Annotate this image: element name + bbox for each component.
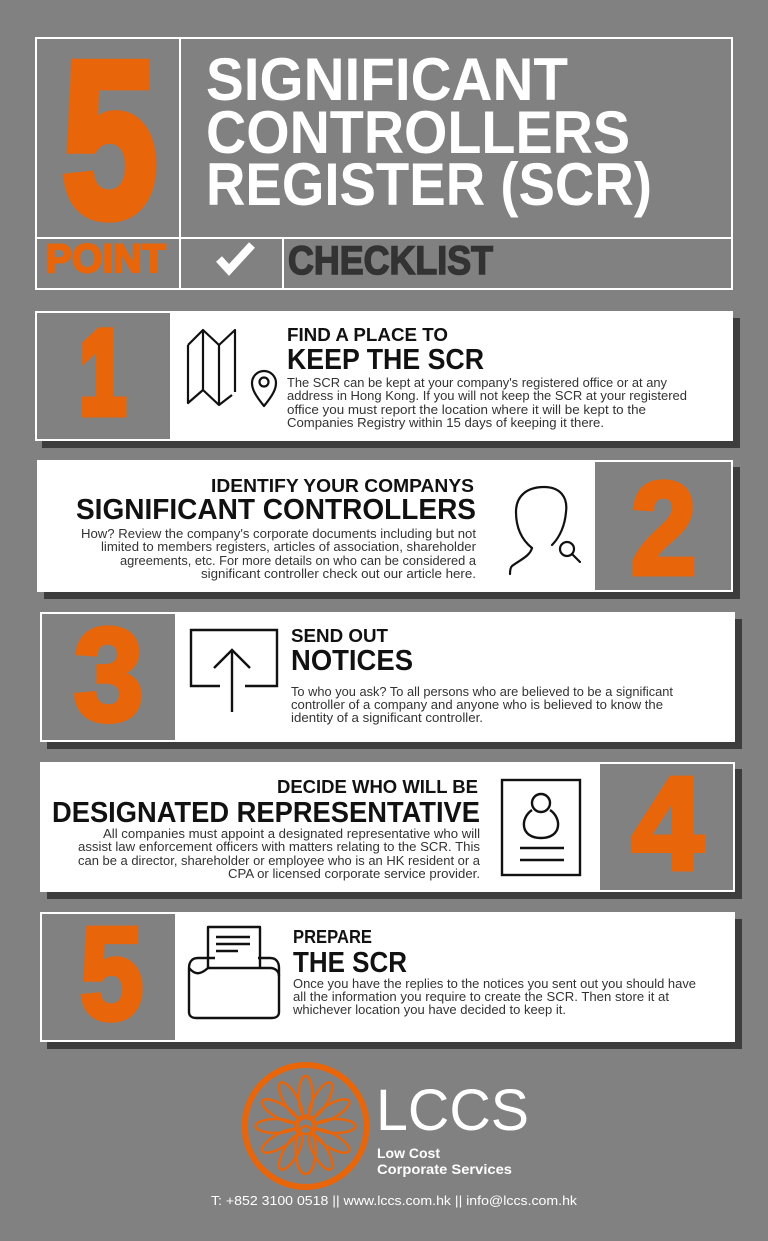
card 1: keep the SCR: The SCR can be kept at your company's registered office or at any xyxy=(287,376,668,390)
card 3: send out notices: identity of a significant controller. xyxy=(291,711,483,725)
footer contact line: T: +852 3100 0518 || www.lccs.com.hk || info@lccs.com.hk xyxy=(211,1193,578,1208)
icon: checkmark xyxy=(219,245,252,270)
big number 5: 5 xyxy=(62,16,158,264)
card 1: keep the SCR: address in Hong Kong. If you will not keep the SCR at your registered xyxy=(287,389,687,403)
card 3: send out notices xyxy=(40,601,742,749)
card 1: keep the SCR: office you must report the location where it will be kept to the xyxy=(287,403,646,417)
card 3: send out notices: 3 xyxy=(74,601,144,748)
logo wordmark: LCCS xyxy=(376,1078,529,1143)
card 2: significant controllers: agreements, etc. For more details on who can be considered a xyxy=(120,554,476,568)
card 4: designated representative: CPA or licensed corporate service provider. xyxy=(228,867,480,881)
icon: printer / document tray xyxy=(189,927,279,1018)
card 2: significant controllers: significant controller check out our article here. xyxy=(201,567,476,581)
logo wordmark: Low Cost xyxy=(377,1146,441,1161)
card 4: designated representative: All companies must appoint a designated representative who will xyxy=(103,827,480,841)
card 4: designated representative: 4 xyxy=(632,750,704,897)
card 5: prepare the SCR: THE SCR xyxy=(293,947,407,979)
card 4: designated representative: DECIDE WHO WILL BE xyxy=(277,777,478,797)
logo: LCCS emblem xyxy=(245,1065,367,1187)
card 5: prepare the SCR: 5 xyxy=(80,900,144,1047)
POINT label: POINT xyxy=(46,237,166,281)
title: SIGNIFICANT xyxy=(206,46,568,113)
card 3: send out notices: SEND OUT xyxy=(291,626,388,646)
title: CONTROLLERS xyxy=(206,99,630,166)
card 1: keep the SCR: 1 xyxy=(80,307,126,439)
card 2: significant controllers: 2 xyxy=(631,455,697,602)
card 5: prepare the SCR: PREPARE xyxy=(293,927,372,947)
card 2: significant controllers xyxy=(37,455,740,602)
card 1: keep the SCR: Companies Registry within 15 days of keeping it there. xyxy=(287,416,604,430)
card 5: prepare the SCR xyxy=(40,900,742,1049)
card 2: significant controllers: limited to members registers, articles of association, shareholder xyxy=(101,540,476,554)
card 5: prepare the SCR: whichever location you have decided to keep it. xyxy=(292,1003,566,1017)
card 2: significant controllers: IDENTIFY YOUR COMPANYS xyxy=(211,476,474,496)
card 1: keep the SCR xyxy=(35,307,740,448)
title: REGISTER (SCR) xyxy=(206,151,652,218)
card 3: send out notices: NOTICES xyxy=(291,645,413,677)
icon: map with pin xyxy=(188,330,276,406)
card 4: designated representative xyxy=(40,750,742,899)
card 1: keep the SCR: FIND A PLACE TO xyxy=(287,325,448,345)
icon: ID card xyxy=(502,780,580,875)
header panel xyxy=(36,16,732,289)
card 4: designated representative: assist law enforcement officers with matters relating to the SCR. This xyxy=(78,840,480,854)
card 1: keep the SCR: KEEP THE SCR xyxy=(287,344,484,376)
logo wordmark: Corporate Services xyxy=(377,1162,512,1177)
card 5: prepare the SCR: Once you have the replies to the notices you sent out you should have xyxy=(293,977,696,991)
card 4: designated representative: DESIGNATED REPRESENTATIVE xyxy=(52,797,480,829)
card 2: significant controllers: How? Review the company's corporate documents including but not xyxy=(81,527,477,541)
card 4: designated representative: can be a director, shareholder or employee who is an HK resident or a xyxy=(78,854,480,868)
card 3: send out notices: To who you ask? To all persons who are believed to be a significant xyxy=(291,685,674,699)
card 2: significant controllers: SIGNIFICANT CONTROLLERS xyxy=(76,494,476,526)
card 5: prepare the SCR: all the information you require to create the SCR. Then store it at xyxy=(293,990,670,1004)
icon: upload box xyxy=(191,630,277,712)
icon: person with magnifier xyxy=(510,487,580,574)
title xyxy=(206,46,652,218)
card 3: send out notices: controller of a company and anyone who is believed to know the xyxy=(291,698,663,712)
CHECKLIST label: CHECKLIST xyxy=(288,239,493,283)
logo wordmark xyxy=(376,1078,529,1177)
